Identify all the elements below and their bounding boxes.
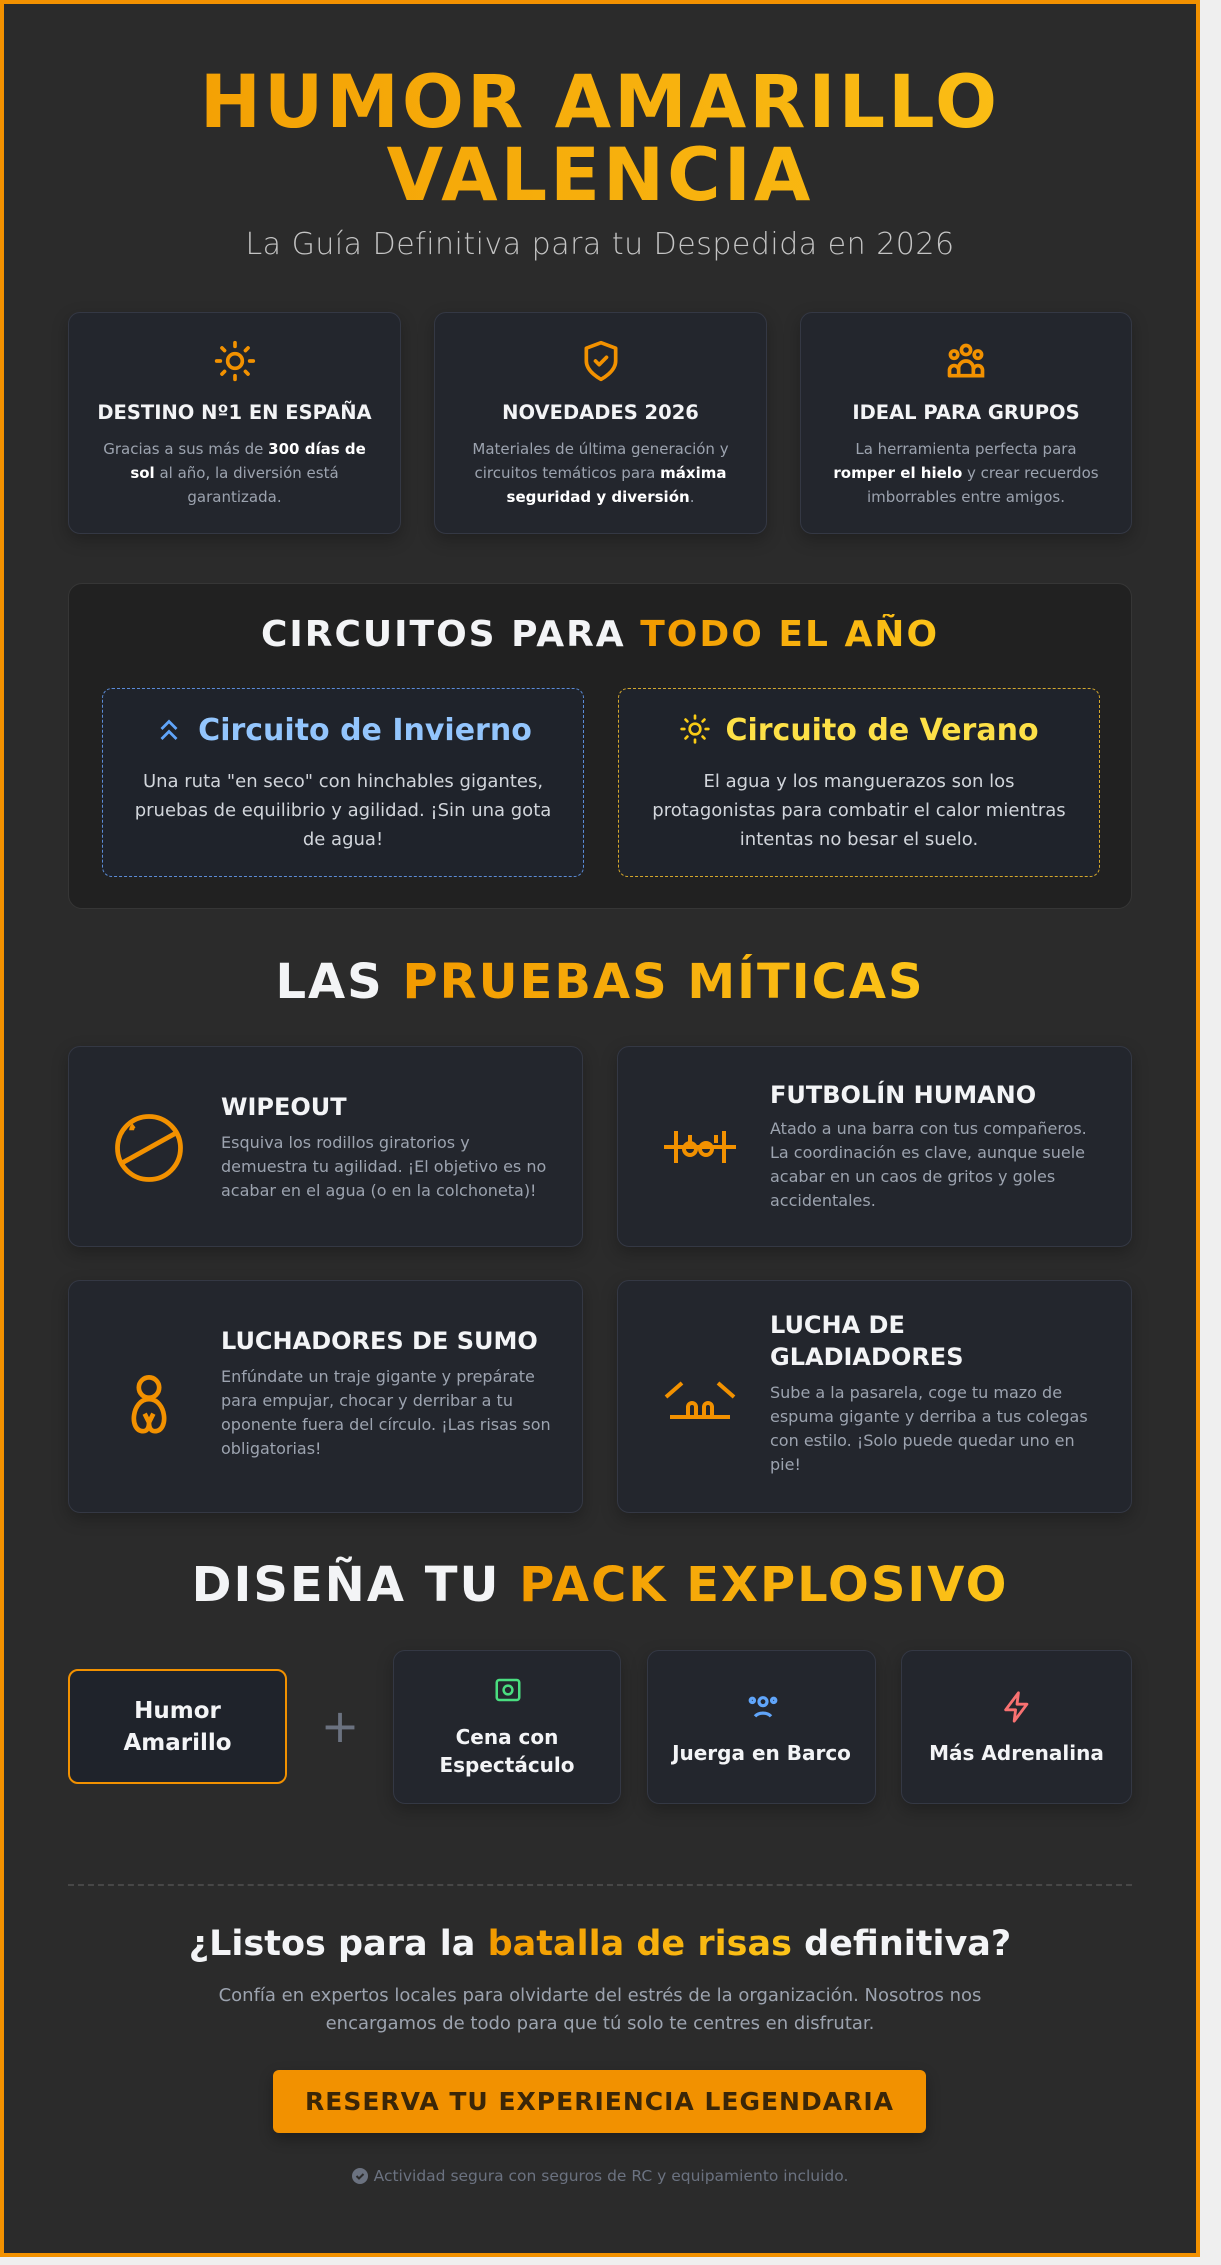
card: grupos: IDEAL PARA GRUPOS bbox=[852, 401, 1080, 424]
button bbox=[273, 2070, 926, 2133]
card: gladiadores bbox=[617, 1280, 1132, 1513]
heading: pack: DISEÑA TU PACK EXPLOSIVO bbox=[192, 1557, 1008, 1613]
subtitle: La Guía Definitiva para tu Despedida en 2026 bbox=[245, 227, 955, 262]
heading: pruebas: LAS PRUEBAS MÍTICAS bbox=[275, 954, 925, 1010]
footer note: Actividad segura con seguros de RC y equipamiento incluido. bbox=[374, 2167, 848, 2185]
card: destino: Gracias a sus más de 300 días de sol al año, la diversión está garantizada. bbox=[103, 440, 366, 506]
card: futbolin: FUTBOLÍN HUMANO bbox=[770, 1081, 1036, 1109]
card: destino bbox=[68, 312, 401, 534]
pack: humor amarillo: Humor bbox=[134, 1698, 221, 1724]
card: sumo: LUCHADORES DE SUMO bbox=[221, 1327, 538, 1355]
card: gladiadores: Sube a la pasarela, coge tu mazo de espuma gigante y derriba a tus colegas con estilo. ¡Solo puede quedar uno en pie! bbox=[770, 1383, 1088, 1474]
card: sumo bbox=[68, 1280, 583, 1513]
card: novedades: Materiales de última generación y circuitos temáticos para máxima seguridad y diversión. bbox=[472, 440, 729, 506]
icon: gladiators bbox=[664, 1382, 736, 1419]
card: novedades bbox=[434, 312, 767, 534]
card: gladiadores: LUCHA DE bbox=[770, 1311, 905, 1339]
card: novedades: NOVEDADES 2026 bbox=[502, 401, 699, 424]
pack: humor amarillo: Amarillo bbox=[123, 1730, 232, 1756]
box: invierno: Una ruta "en seco" con hinchables gigantes, pruebas de equilibrio y agilidad. ¡Sin una gota de agua! bbox=[135, 771, 551, 850]
icon: ball bbox=[115, 1114, 183, 1182]
card: futbolin: Atado a una barra con tus compañeros. La coordinación es clave, aunque suele acabar en un caos de gritos y goles accidentales. bbox=[770, 1119, 1087, 1210]
icon: foosball bbox=[664, 1131, 736, 1163]
icon: cash bbox=[496, 1678, 520, 1702]
box: invierno bbox=[102, 688, 584, 877]
icon: plus: + bbox=[321, 1699, 359, 1753]
icon: sumo bbox=[132, 1375, 166, 1434]
heading: invierno: Circuito de Invierno bbox=[198, 713, 532, 748]
icon: group bbox=[948, 344, 984, 378]
icon: sun bbox=[214, 340, 256, 382]
title: HUMOR AMARILLO bbox=[200, 60, 1000, 145]
box: verano: El agua y los manguerazos son los protagonistas para combatir el calor mientras intentas no besar el suelo. bbox=[652, 771, 1066, 850]
panel: circuitos bbox=[68, 583, 1132, 909]
card: gladiadores: GLADIADORES bbox=[770, 1343, 963, 1371]
heading: verano: Circuito de Verano bbox=[725, 713, 1039, 748]
box: verano bbox=[618, 688, 1100, 877]
pack: cena: Cena con bbox=[456, 1725, 558, 1749]
pack: barco bbox=[647, 1650, 876, 1804]
title bbox=[0, 66, 1200, 212]
icon: bolt bbox=[1004, 1691, 1028, 1723]
heading: circuitos: CIRCUITOS PARA TODO EL AÑO bbox=[261, 614, 939, 655]
pack: humor amarillo bbox=[68, 1669, 287, 1784]
text: cta: Confía en expertos locales para olvidarte del estrés de la organización. Nosotros nos encargamos de todo para que tú solo te centres en disfrutar. bbox=[219, 1985, 981, 2034]
pack: adrenalina bbox=[901, 1650, 1132, 1804]
icon: shield bbox=[584, 340, 618, 382]
card: destino: DESTINO Nº1 EN ESPAÑA bbox=[97, 401, 372, 424]
pack: cena: Espectáculo bbox=[439, 1753, 575, 1777]
pack: adrenalina: Más Adrenalina bbox=[929, 1741, 1104, 1765]
icon: people bbox=[748, 1696, 778, 1718]
title: VALENCIA bbox=[387, 133, 813, 218]
card: wipeout bbox=[68, 1046, 583, 1247]
button: RESERVA TU EXPERIENCIA LEGENDARIA bbox=[305, 2087, 894, 2116]
card: grupos bbox=[800, 312, 1132, 534]
heading: cta: ¿Listos para la batalla de risas definitiva? bbox=[189, 1924, 1011, 1964]
card: wipeout: Esquiva los rodillos giratorios y demuestra tu agilidad. ¡El objetivo es no acabar en el agua (o en la colchoneta)! bbox=[221, 1133, 546, 1200]
card: grupos: La herramienta perfecta para romper el hielo y crear recuerdos imborrables entre amigos. bbox=[833, 440, 1099, 506]
card: futbolin bbox=[617, 1046, 1132, 1247]
card: wipeout: WIPEOUT bbox=[221, 1093, 347, 1121]
pack: cena bbox=[393, 1650, 621, 1804]
card: sumo: Enfúndate un traje gigante y prepárate para empujar, chocar y derribar a tu oponente fuera del círculo. ¡Las risas son obligatorias! bbox=[221, 1367, 551, 1458]
pack: barco: Juerga en Barco bbox=[672, 1741, 851, 1765]
